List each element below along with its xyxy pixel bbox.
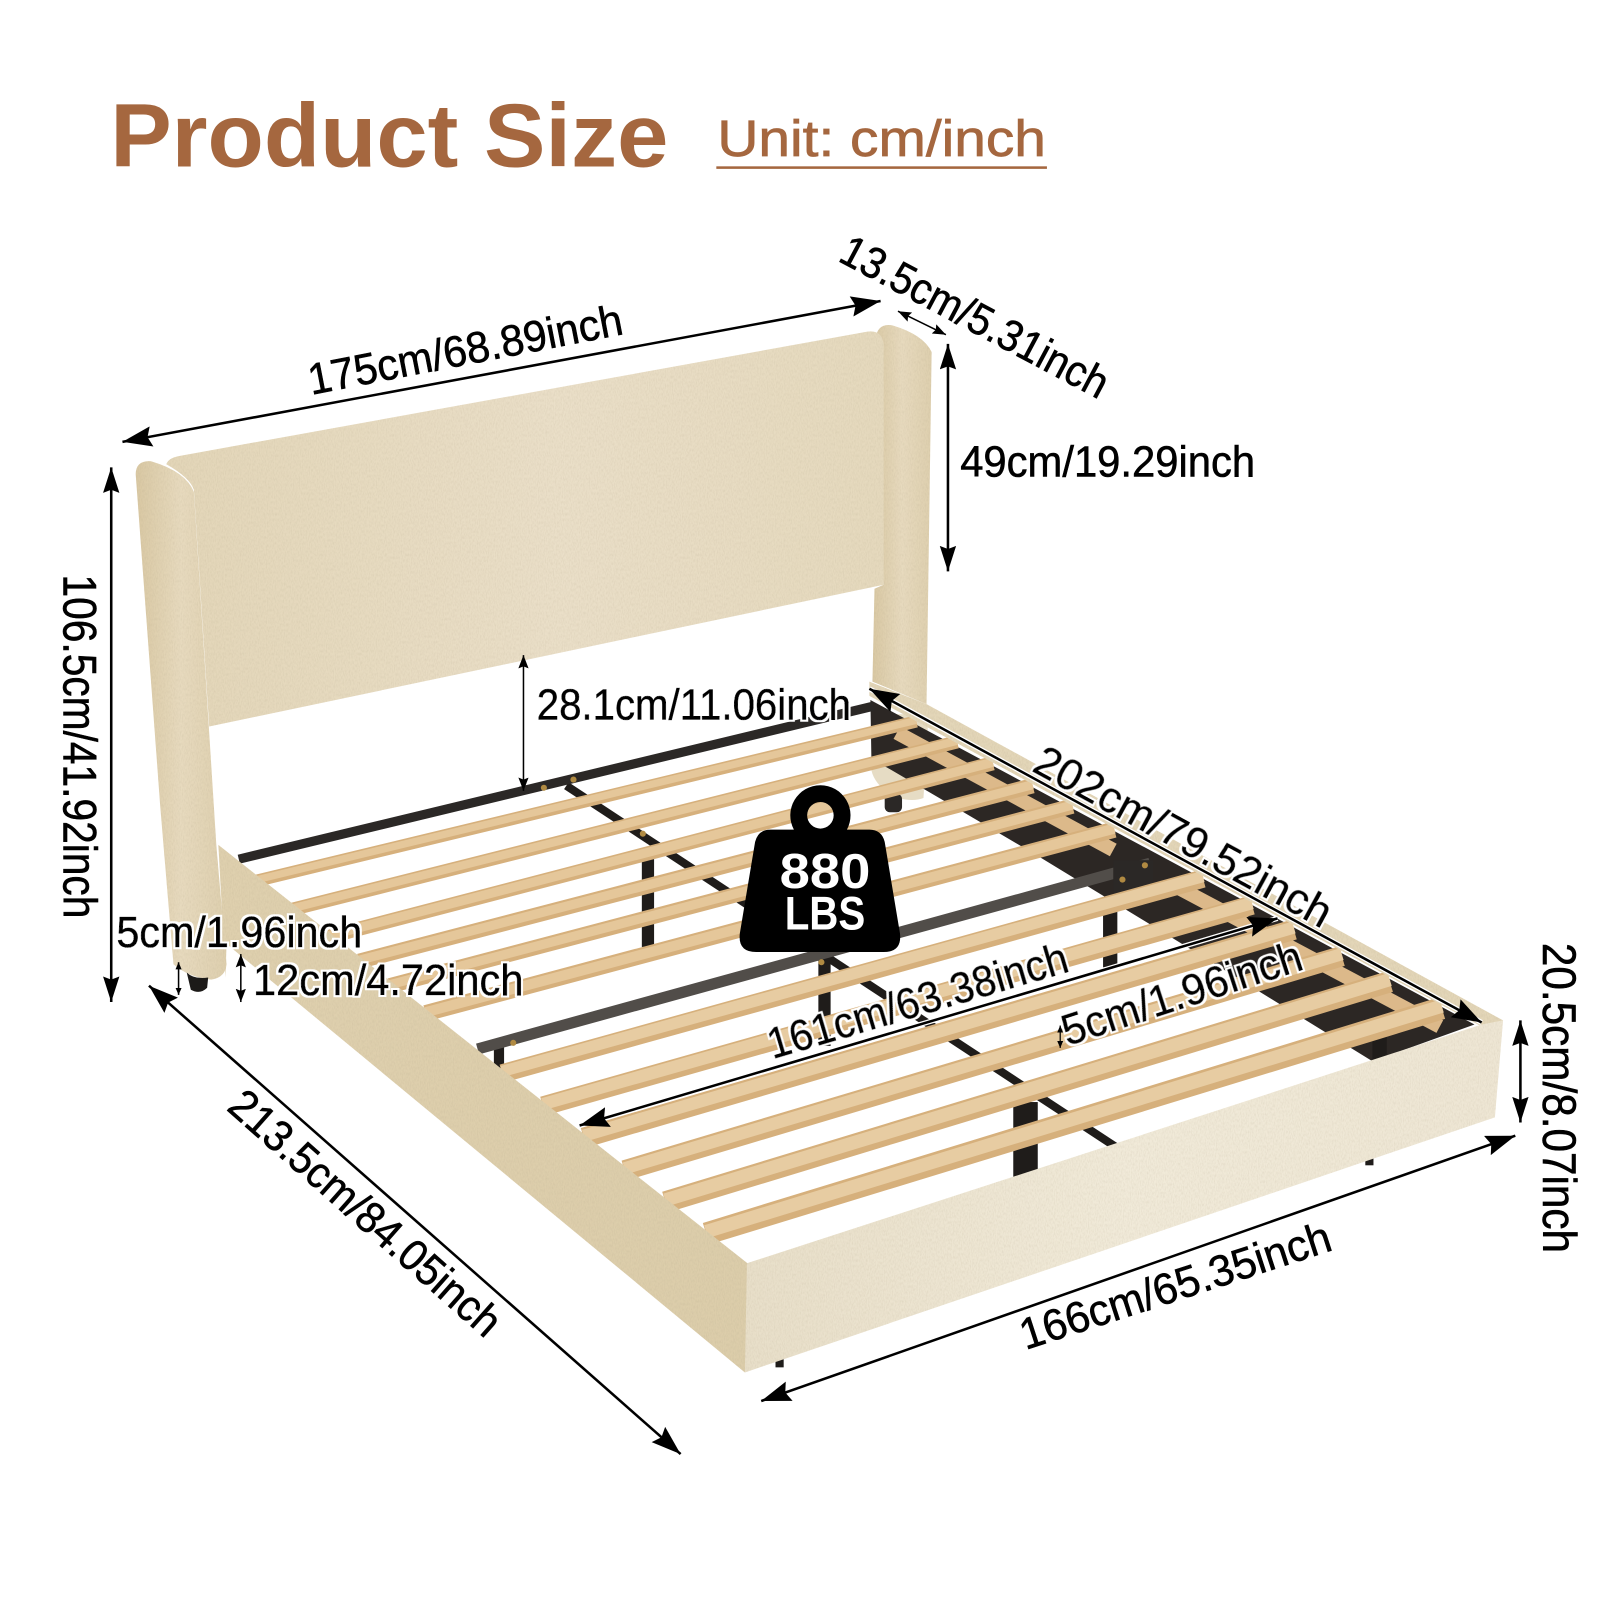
wooden slats [257, 720, 1442, 1234]
dimension: 166cm: 166cm/65.35inch [1013, 1213, 1337, 1360]
arrow: headboard gap [522, 655, 524, 791]
arrow: total width [761, 1136, 1515, 1401]
subheading: unit: Unit: cm/inch [717, 110, 1046, 167]
left side rail [218, 845, 750, 1372]
brass bolts [510, 777, 1148, 1046]
dimension: 13.5cm: 13.5cm/5.31inch [832, 226, 1117, 408]
dimension: 28.1cm: 28.1cm/11.06inch [537, 680, 851, 729]
bed frame [136, 325, 1503, 1372]
wood side strip [897, 733, 1440, 1027]
heading: Product Size: Product Size [110, 86, 668, 186]
dimension: 106.5cm: 106.5cm/41.92inch [53, 574, 105, 918]
fabric upholstery [136, 325, 1503, 1372]
front rail [745, 1020, 1503, 1372]
right wing [872, 325, 932, 704]
dimension: 202cm: 202cm/79.52inch [1026, 736, 1341, 937]
arrow: rail height [1519, 1020, 1522, 1122]
arrow: headboard width [122, 301, 881, 442]
arrow: slat gap [1059, 1026, 1061, 1048]
headboard panel [166, 331, 884, 727]
arrow: total length [149, 986, 681, 1454]
arrow: inner length [869, 689, 1482, 1022]
lower right wing and foot behind frame [871, 714, 929, 812]
dark support band under slats [870, 700, 1474, 1061]
dimension: 213.5cm: 213.5cm/84.05inch [219, 1080, 511, 1347]
far side rail top [869, 682, 1503, 1027]
centre spine beam [566, 786, 1117, 1148]
left wing [136, 461, 227, 980]
arrow: clearance [240, 954, 242, 1002]
dimension: slat gap 5cm: 5cm/1.96inch [1055, 932, 1308, 1055]
arrow: inner width [580, 918, 1278, 1126]
dimension: 49cm: 49cm/19.29inch [960, 438, 1255, 487]
dimension: 175cm: 175cm/68.89inch [304, 296, 627, 405]
arrow: wing depth [898, 311, 946, 335]
dimension: 161cm: 161cm/63.38inch [761, 933, 1074, 1069]
dimension: foot 5cm: 5cm/1.96inch [116, 908, 362, 957]
arrow: headboard height [947, 344, 949, 571]
weight capacity icon: 880 LBS: 880 [780, 845, 870, 899]
support legs [494, 849, 1387, 1367]
rear foot [187, 972, 208, 992]
right bracket [1113, 860, 1153, 893]
dimension: 12cm: 12cm/4.72inch [253, 956, 523, 1005]
weight capacity icon: 880 LBS [740, 785, 900, 952]
weight capacity icon: 880 LBS: LBS [785, 888, 865, 940]
arrow: total height [110, 467, 112, 1002]
dimension: 20.5cm: 20.5cm/8.07inch [1533, 943, 1585, 1253]
middle crossbeam [478, 863, 1150, 1049]
arrow: foot height [178, 962, 180, 995]
back crossbeam [239, 706, 873, 859]
